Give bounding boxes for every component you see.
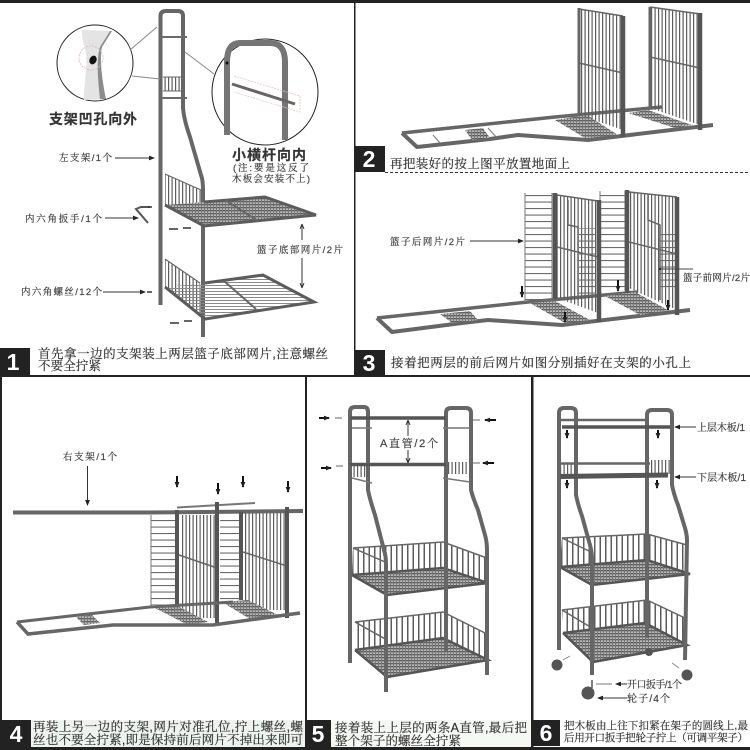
caption 6: 把木板由上往下扣紧在架子的圆线上,最 bbox=[564, 719, 748, 732]
label: A straight tube bbox=[380, 420, 438, 463]
caption 4 bbox=[31, 719, 305, 747]
caption 5 bbox=[331, 720, 531, 748]
label: left bracket: 左支架/1个 bbox=[59, 152, 112, 164]
caption 5: 接着装上上层的两条A直管,最后把 bbox=[335, 720, 527, 735]
caption 6: 后用开口扳手把轮子拧上（可调平架子） bbox=[564, 731, 748, 744]
panel: step 5 bbox=[307, 407, 531, 748]
arrows down bbox=[522, 280, 668, 322]
left bracket frame bbox=[160, 11, 203, 337]
caption 3: 接着把两层的前后网片如图分别插好在支架的小孔上 bbox=[391, 355, 691, 370]
posts bbox=[555, 190, 677, 322]
label: wheels: 轮子/4个 bbox=[627, 692, 670, 705]
label: left bracket bbox=[59, 152, 154, 164]
caption 4: 再装上另一边的支架,网片对准孔位,拧上螺丝,螺 bbox=[33, 719, 303, 734]
note: second line: 木板会安装不上) bbox=[232, 173, 310, 185]
heading: small crossbar inward: 小横杆向内 bbox=[232, 147, 306, 163]
heading: bracket hole outward: 支架凹孔向外 bbox=[49, 111, 137, 127]
panel: step 4 bbox=[2, 451, 305, 747]
label: right bracket bbox=[63, 451, 117, 505]
step number 5: 5 bbox=[312, 721, 325, 747]
upright side panel left bbox=[579, 8, 623, 137]
step number 3: 3 bbox=[363, 350, 375, 376]
label: upper wood board bbox=[675, 421, 745, 434]
caption 4: 丝也不要全拧紧,即是保持前后网片不掉出来即可 bbox=[33, 732, 303, 747]
step number 6 bbox=[533, 720, 560, 746]
meshes on ground bbox=[465, 110, 692, 140]
label: lower wood board: 下层木板/1 bbox=[697, 471, 746, 484]
label: hex screws: 内六角螺丝/12个 bbox=[21, 286, 102, 298]
label: lower wood board bbox=[675, 471, 746, 484]
step number 2: 2 bbox=[363, 146, 375, 172]
label: hex wrench: 内六角扳手/1个 bbox=[25, 213, 102, 225]
nets bbox=[151, 513, 287, 625]
panel: step 6 bbox=[533, 408, 748, 746]
step number 6: 6 bbox=[540, 720, 552, 746]
detail circle: hole bbox=[57, 25, 160, 101]
label: rear net bbox=[390, 236, 523, 248]
upper bottom mesh bbox=[165, 174, 316, 226]
lower bottom mesh bbox=[165, 259, 314, 319]
screws bbox=[147, 207, 192, 323]
label: A straight tube: A直管/2个 bbox=[380, 436, 438, 450]
lower basket bbox=[355, 612, 488, 677]
panel: step 1 bbox=[0, 11, 343, 375]
board down arrows bbox=[567, 430, 658, 488]
top bracket rail bbox=[13, 503, 303, 512]
posts bbox=[177, 502, 287, 625]
flat frame on ground bbox=[402, 107, 713, 147]
label: front net bbox=[659, 268, 750, 284]
step number 5 bbox=[307, 720, 331, 747]
caption 6 bbox=[564, 719, 748, 744]
caption 1 bbox=[38, 346, 328, 373]
caption 1: 首先拿一边的支架装上两层篮子底部网片,注意螺丝 bbox=[38, 346, 328, 361]
caption 1: 不要全拧紧 bbox=[38, 358, 101, 373]
label: open-end spanner bbox=[596, 678, 682, 691]
label: basket bottom mesh: 篮子底部网片/2片 bbox=[257, 244, 343, 256]
step number 1: 1 bbox=[7, 349, 20, 375]
screw arrows bbox=[177, 476, 288, 494]
note: wood board warning: (注:要是这反了 bbox=[233, 162, 309, 174]
panel: step 3 bbox=[355, 190, 750, 376]
brackets bbox=[559, 408, 687, 675]
label: right bracket: 右支架/1个 bbox=[63, 451, 117, 463]
label: hex wrench bbox=[25, 207, 150, 225]
panel: step 2 bbox=[355, 7, 713, 172]
caption 5: 整个架子的螺丝全拧紧 bbox=[335, 733, 461, 748]
detail circle: small crossbar bbox=[185, 39, 318, 145]
bottom bracket rail bbox=[17, 602, 300, 634]
wood boards and tubes bbox=[557, 420, 670, 476]
step number 2 bbox=[355, 146, 385, 172]
upright side panel right bbox=[650, 7, 700, 130]
lower basket bbox=[562, 600, 687, 662]
label: wheels bbox=[598, 692, 670, 705]
upper basket bbox=[560, 534, 690, 585]
caption 2: 再把装好的按上图平放置地面上 bbox=[390, 156, 570, 171]
rear nets bbox=[525, 191, 625, 302]
label: upper wood board: 上层木板/1 bbox=[697, 421, 745, 434]
step number 4 bbox=[2, 720, 31, 747]
left and right brackets bbox=[350, 407, 487, 692]
label: basket bottom mesh bbox=[257, 224, 343, 288]
side and front nets bbox=[557, 192, 677, 313]
label: open-end spanner: 开口扳手/1个 bbox=[627, 678, 682, 691]
step number 4: 4 bbox=[10, 721, 23, 747]
casters bbox=[552, 648, 692, 700]
step number 3 bbox=[355, 350, 385, 376]
upper basket bbox=[352, 542, 488, 595]
flat frame on ground bbox=[377, 292, 690, 332]
label: hex screws bbox=[21, 286, 145, 298]
side screw arrows bbox=[319, 418, 496, 468]
step number 1 bbox=[0, 348, 30, 375]
A straight tubes bbox=[350, 418, 446, 464]
label: rear net: 篮子后网片/2片 bbox=[390, 236, 465, 248]
label: front net: 篮子前网片/2片 bbox=[683, 272, 750, 284]
